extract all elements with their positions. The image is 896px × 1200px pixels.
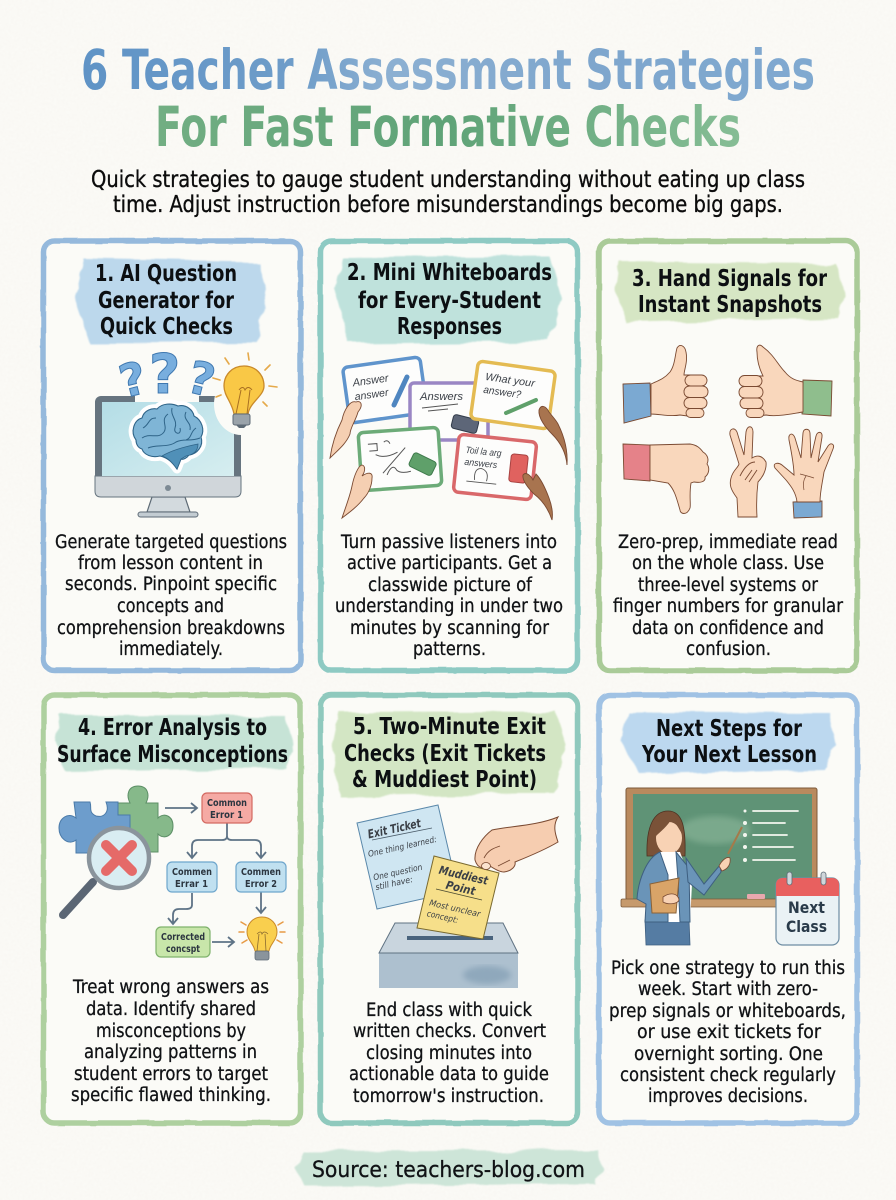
icon: computer monitor with brain, question marks and light bulb xyxy=(95,343,277,517)
whiteboard: yellow: What your xyxy=(484,371,536,390)
heading: hand signals: 3. Hand Signals for xyxy=(632,264,827,292)
whiteboard: yellow: answer? xyxy=(483,384,522,401)
body text: next steps: Pick one strategy to run this xyxy=(611,958,845,979)
body text: error analysis: specific flawed thinking. xyxy=(71,1085,271,1106)
heading: exit checks xyxy=(332,711,566,797)
whiteboard: blue: answer xyxy=(354,387,390,403)
heading: error analysis: Surface Misconceptions xyxy=(57,740,288,768)
body text: hand signals: confusion. xyxy=(686,639,771,660)
box: common error 1: Common xyxy=(207,798,247,809)
icon: question marks xyxy=(114,343,220,409)
box: common error branch 1: Commen xyxy=(172,867,212,878)
exit ticket card: Exit Ticket xyxy=(366,816,423,841)
hands xyxy=(330,402,567,520)
body text: exit checks: actionable data to guide xyxy=(349,1064,549,1085)
body text: hand signals: finger numbers for granular xyxy=(613,596,843,617)
body text: error analysis: analyzing patterns in xyxy=(84,1042,257,1063)
icon: question marks: ? xyxy=(114,351,152,409)
icon: puzzle pieces and magnifying glass xyxy=(59,786,173,915)
body text: AI question generator: comprehension breakdowns xyxy=(57,618,285,639)
body text: exit checks xyxy=(349,1000,549,1107)
body text: next steps: consistent check regularly xyxy=(620,1065,836,1086)
body text: AI question generator xyxy=(55,532,287,660)
body text: AI question generator: from lesson content in xyxy=(78,553,263,574)
heading: hand signals: Instant Snapshots xyxy=(638,290,822,318)
muddiest point card: Point xyxy=(444,878,477,898)
body text: error analysis: data. Identify shared xyxy=(86,999,256,1020)
illustration: chalkboard xyxy=(621,788,817,907)
whiteboard: purple: Answers xyxy=(419,391,464,403)
flowchart: error tree xyxy=(156,793,286,960)
body text: AI question generator: concepts and xyxy=(117,596,224,617)
whiteboard: red xyxy=(453,434,537,500)
subtitle: time. Adjust instruction before misunderstandings become big gaps. xyxy=(113,192,783,218)
body text: next steps: or use exit tickets for xyxy=(637,1022,821,1043)
body text: exit checks: written checks. Convert xyxy=(353,1021,546,1042)
box: corrected concept: Corrected xyxy=(161,932,205,943)
panel: mini whiteboards xyxy=(320,241,578,670)
panel: AI question generator xyxy=(44,241,300,670)
hand holding card xyxy=(475,817,558,872)
whiteboard: red: Toil la arg xyxy=(465,445,503,460)
body text: mini whiteboards: patterns. xyxy=(413,639,486,660)
icon: calendar next class: Class xyxy=(786,917,827,936)
exit ticket card: One thing learned: xyxy=(367,835,438,860)
heading: next steps: Next Steps for xyxy=(656,714,802,742)
body text: next steps: overnight sorting. One xyxy=(634,1044,823,1065)
box: common error 1 xyxy=(202,793,252,823)
icon: small light bulb xyxy=(239,917,285,960)
heading: error analysis: 4. Error Analysis to xyxy=(78,713,267,741)
body text: hand signals xyxy=(613,532,843,660)
icon: calendar next class xyxy=(776,872,839,945)
whiteboard: blue: Answer xyxy=(351,372,391,389)
heading: mini whiteboards: Responses xyxy=(397,312,502,340)
body text: AI question generator: Generate targeted questions xyxy=(55,532,287,553)
heading: hand signals xyxy=(616,262,845,322)
body text: error analysis xyxy=(71,977,271,1106)
body text: next steps: improves decisions. xyxy=(648,1086,808,1107)
box: common error branch 2: Commen xyxy=(241,867,281,878)
box: common error branch 1: Errar 1 xyxy=(175,879,208,890)
icon: thumbs up, green cuff xyxy=(739,345,832,418)
box: common error branch 2 xyxy=(236,862,286,892)
heading: exit checks: & Muddiest Point) xyxy=(352,765,537,793)
heading: AI question generator xyxy=(75,259,266,344)
body text: AI question generator: seconds. Pinpoint specific xyxy=(65,574,277,595)
panel: next steps xyxy=(599,695,857,1123)
icon: question marks: ? xyxy=(182,350,220,408)
body text: mini whiteboards: Turn passive listeners into xyxy=(340,532,557,553)
body text: mini whiteboards: active participants. Get a xyxy=(347,553,552,574)
body text: mini whiteboards: classwide picture of xyxy=(368,575,532,596)
exit ticket card xyxy=(357,805,458,909)
source credit: Source: teachers-blog.com xyxy=(312,1158,585,1183)
body text: exit checks: closing minutes into xyxy=(366,1043,532,1064)
heading: mini whiteboards: for Every-Student xyxy=(358,286,541,314)
icon: brain xyxy=(133,404,203,469)
exit ticket card: still have: xyxy=(375,875,414,893)
box: corrected concept xyxy=(156,927,210,957)
box: corrected concept: concspt xyxy=(166,944,200,955)
body text: next steps: prep signals or whiteboards, xyxy=(609,1001,846,1022)
illustration: exit ticket box xyxy=(357,805,558,988)
panel: exit checks xyxy=(320,695,578,1123)
body text: mini whiteboards xyxy=(335,532,563,660)
body text: hand signals: Zero-prep, immediate read xyxy=(618,532,838,553)
whiteboard: blue xyxy=(342,357,428,423)
heading: next steps xyxy=(620,712,836,774)
body text: hand signals: three-level systems or xyxy=(638,575,818,596)
box: common error branch 2: Error 2 xyxy=(245,879,277,890)
illustration: whiteboards held by students xyxy=(330,357,567,520)
panel: error analysis xyxy=(44,695,300,1123)
panel: hand signals xyxy=(599,241,857,670)
icon: open hand five fingers xyxy=(774,429,834,518)
icon: calendar next class: Next xyxy=(788,898,825,917)
heading: exit checks: 5. Two-Minute Exit xyxy=(353,712,546,740)
title xyxy=(81,38,815,159)
whiteboard: yellow xyxy=(470,361,556,429)
heading: AI question generator: Generator for xyxy=(98,286,234,314)
heading: AI question generator: Quick Checks xyxy=(100,312,233,340)
heading: exit checks: Checks (Exit Tickets xyxy=(344,739,546,767)
body text: exit checks: End class with quick xyxy=(366,1000,532,1021)
muddiest point card: Most unclear xyxy=(428,898,482,920)
body text: mini whiteboards: minutes by scanning for xyxy=(350,618,549,639)
heading: AI question generator: 1. AI Question xyxy=(95,259,237,287)
muddiest point card: Muddiest xyxy=(438,863,490,888)
whiteboard: green xyxy=(358,427,442,491)
whiteboard: red: answers xyxy=(464,457,498,471)
illustration: teacher xyxy=(637,811,742,945)
icon: thumbs up, blue cuff xyxy=(623,345,708,423)
icon: light bulb xyxy=(213,353,277,428)
body text: mini whiteboards: understanding in under two xyxy=(335,596,563,617)
body text: error analysis: misconceptions by xyxy=(96,1021,246,1042)
body text: next steps: week. Start with zero- xyxy=(638,979,818,1000)
body text: exit checks: tomorrow's instruction. xyxy=(353,1086,544,1107)
icon: two fingers hand xyxy=(730,427,766,517)
whiteboard: purple xyxy=(410,383,488,440)
body text: hand signals: data on confidence and xyxy=(632,618,824,639)
body text: error analysis: Treat wrong answers as xyxy=(72,977,269,998)
icon: thumbs down, red cuff xyxy=(623,444,709,514)
subtitle xyxy=(91,167,805,218)
heading: error analysis xyxy=(55,713,294,771)
body text: next steps xyxy=(609,958,846,1107)
heading: next steps: Your Next Lesson xyxy=(641,740,817,768)
body text: error analysis: student errors to target xyxy=(74,1064,268,1085)
muddiest point card: concept: xyxy=(426,909,459,926)
box: common error 1: Error 1 xyxy=(210,810,243,821)
ballot box xyxy=(379,923,518,988)
exit ticket card: One question xyxy=(372,863,423,883)
heading: mini whiteboards xyxy=(335,257,562,344)
box: common error branch 1 xyxy=(167,862,217,892)
source credit xyxy=(295,1150,603,1186)
body text: AI question generator: immediately. xyxy=(119,639,223,660)
heading: mini whiteboards: 2. Mini Whiteboards xyxy=(347,258,552,286)
body text: hand signals: on the whole class. Use xyxy=(632,553,824,574)
icon: question marks: ? xyxy=(149,343,180,406)
muddiest point card xyxy=(417,856,499,939)
